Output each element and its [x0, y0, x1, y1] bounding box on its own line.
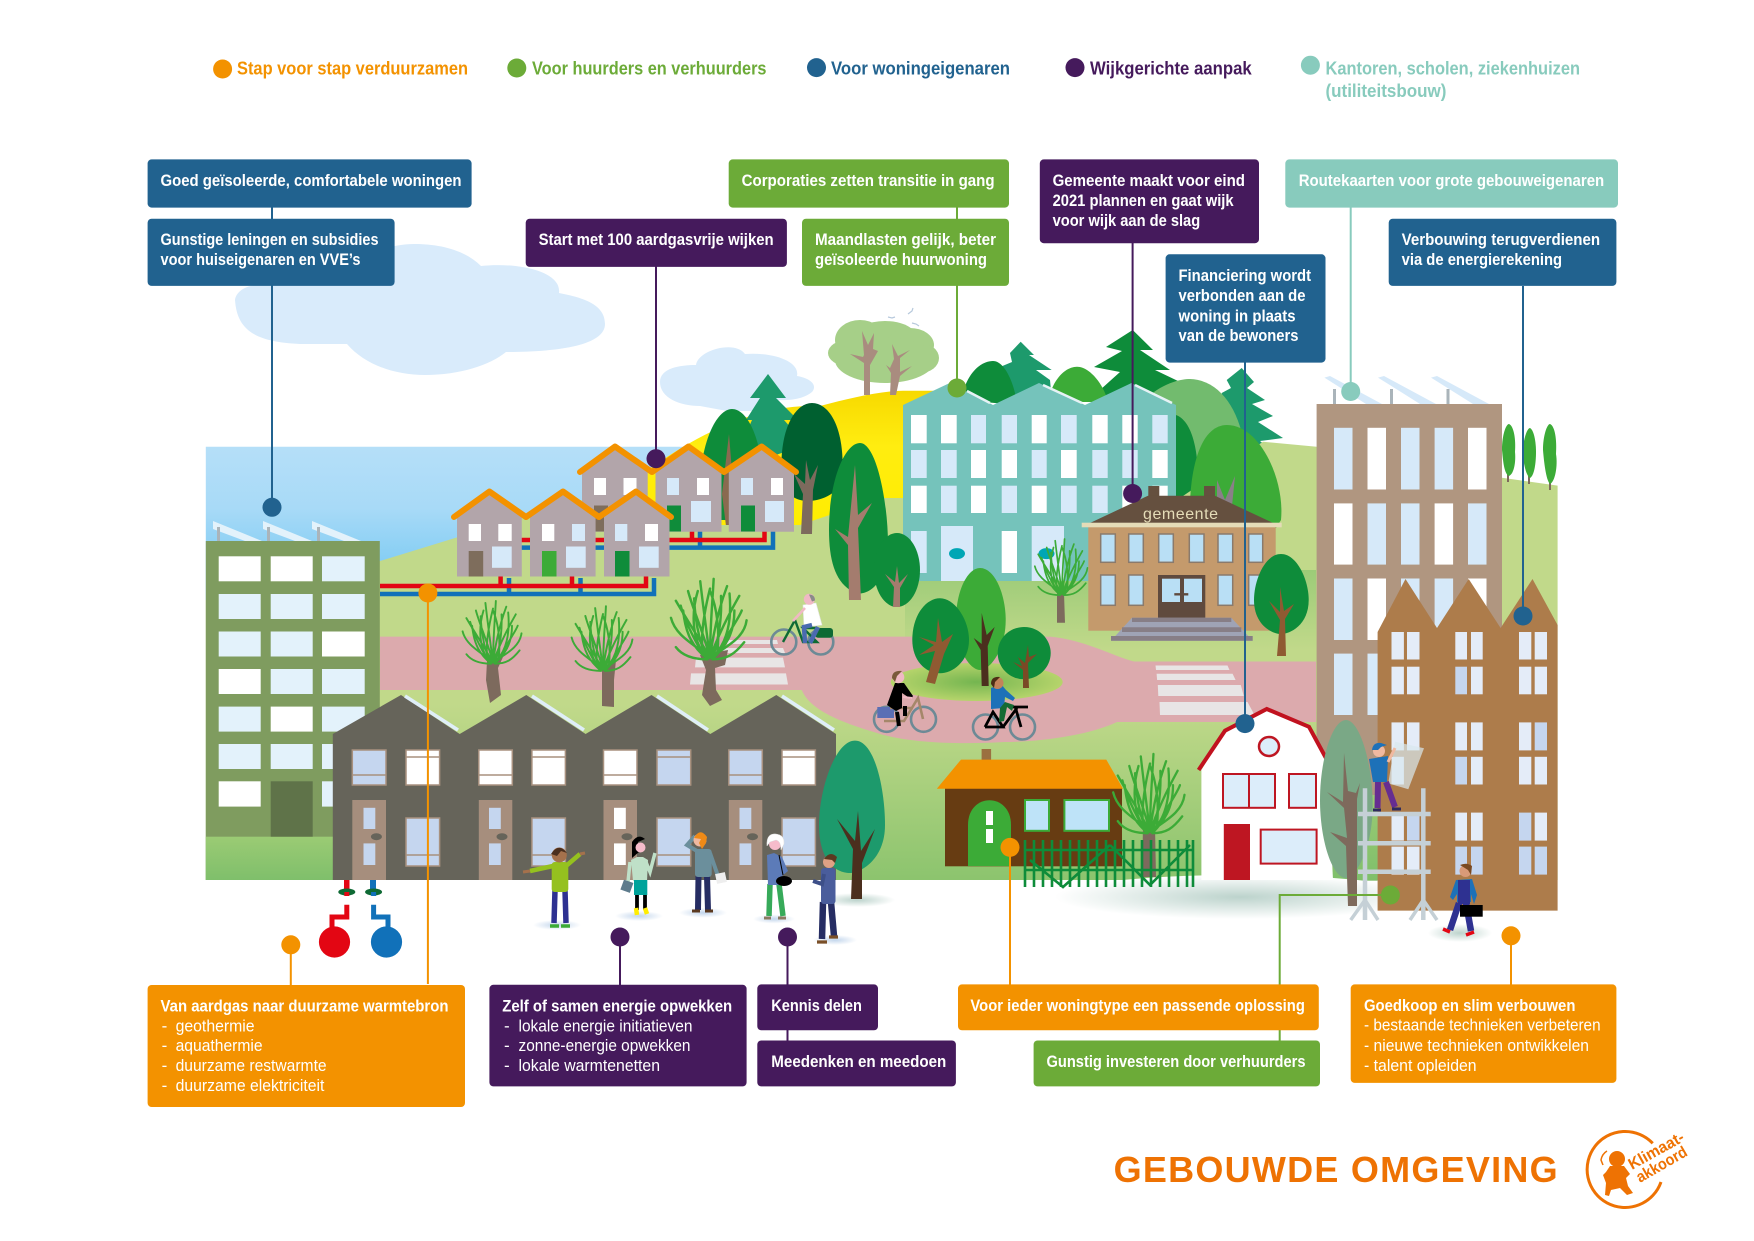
connector: verbouwing	[1514, 286, 1532, 626]
orange roof house	[937, 749, 1123, 866]
box: zelf of samen: zonne-energie opwekken	[518, 1036, 690, 1055]
box: goedkoop en slim: Goedkoop en slim verbouwen	[1364, 996, 1575, 1015]
poplars	[1502, 424, 1557, 490]
sea and sky	[206, 447, 730, 600]
connector: routekaarten	[1341, 207, 1360, 401]
grey-green tree	[1320, 720, 1373, 906]
box: gemeente plannen: 2021 plannen en gaat wijk	[1053, 191, 1234, 210]
box: zelf of samen: -	[504, 1036, 510, 1055]
box: kennis delen: Kennis delen	[771, 996, 862, 1015]
box: routekaarten	[1285, 159, 1618, 208]
box: financiering: van de bewoners	[1178, 326, 1298, 345]
road and island	[380, 637, 1316, 743]
round tree behind town hall	[1190, 425, 1281, 528]
box: van aardgas	[148, 985, 465, 1107]
crosswalk right	[1156, 666, 1254, 715]
connector: warmtenet	[418, 584, 437, 984]
box: meedenken: Meedenken en meedoen	[771, 1052, 946, 1071]
teal apartment building	[903, 383, 1176, 581]
legend item: woningeigenaren: Voor woningeigenaren	[831, 58, 1010, 78]
box: gemeente plannen: voor wijk aan de slag	[1053, 211, 1200, 230]
legend item: wijkgericht: Wijkgerichte aanpak	[1090, 58, 1253, 78]
box: van aardgas: duurzame elektriciteit	[176, 1076, 325, 1095]
tall office building	[1317, 376, 1502, 881]
legend	[213, 56, 1580, 101]
box: van aardgas: -	[162, 1076, 167, 1095]
box: goed geisoleerd	[148, 159, 472, 208]
legend item: stap voor stap: Stap voor stap verduurzamen	[237, 58, 468, 78]
connector: gemeente	[1123, 243, 1142, 503]
round trees behind the flats	[699, 330, 1245, 534]
box: goedkoop en slim: - nieuwe technieken ontwikkelen	[1364, 1036, 1589, 1055]
connector: wijken	[646, 266, 666, 468]
illustration: neighbourhood landscape	[206, 308, 1558, 958]
box: gemeente plannen: Gemeente maakt voor eind	[1053, 171, 1245, 190]
box: financiering: verbonden aan de	[1178, 286, 1306, 305]
box: routekaarten: Routekaarten voor grote gebouweigenaren	[1299, 171, 1604, 190]
fir trees	[730, 342, 1302, 490]
logo: Klimaatakkoord: akkoord	[1634, 1144, 1690, 1186]
teal tree in front	[819, 741, 895, 907]
box: goedkoop en slim: - talent opleiden	[1364, 1056, 1477, 1075]
box: van aardgas: -	[162, 1016, 167, 1035]
box: corporaties	[729, 159, 1009, 208]
connector: kennis delen	[778, 928, 797, 1041]
cyclist white shirt	[771, 594, 833, 654]
box: gemeente plannen	[1040, 159, 1259, 243]
box: van aardgas: -	[162, 1036, 167, 1055]
willow trees on road	[463, 539, 1088, 707]
gemeente town hall: gemeente	[1143, 506, 1218, 523]
box: goed geisoleerd: Goed geïsoleerde, comfortabele woningen	[160, 171, 462, 190]
birds	[888, 308, 919, 326]
box: van aardgas: Van aardgas naar duurzame warmtebron	[160, 996, 448, 1015]
logo: Klimaatakkoord	[1587, 1129, 1690, 1207]
box: verbouwing: Verbouwing terugverdienen	[1402, 230, 1600, 249]
lower windows	[406, 818, 815, 866]
legend item: utiliteitsbouw	[1301, 56, 1580, 101]
box: corporaties: Corporaties zetten transitie in gang	[742, 171, 995, 190]
back row houses with orange roofs	[580, 444, 796, 532]
box: financiering: woning in plaats	[1178, 306, 1296, 326]
white barn house with red roof	[1199, 709, 1333, 880]
crosswalk left	[690, 640, 788, 684]
island trees	[912, 568, 1051, 688]
willow and garden fence	[1025, 754, 1193, 887]
heating pipes	[380, 530, 773, 594]
box: financiering	[1166, 254, 1326, 363]
gemeente town hall	[1082, 486, 1282, 641]
title: GEBOUWDE OMGEVING	[1114, 1149, 1558, 1190]
connector: warmtebron	[281, 935, 300, 985]
small round tree	[874, 533, 920, 607]
logo: Klimaatakkoord: Klimaat-	[1626, 1129, 1687, 1173]
connector: energie opwekken	[610, 928, 630, 985]
connector: woningtype	[1000, 838, 1020, 985]
box: goedkoop en slim: - bestaande technieken verbeteren	[1364, 1016, 1601, 1035]
box: gunstig investeren: Gunstig investeren door verhuurders	[1046, 1052, 1306, 1071]
box: verbouwing: via de energierekening	[1402, 250, 1562, 269]
cyclist blue shirt	[973, 677, 1035, 740]
box: voor ieder woningtype	[958, 984, 1319, 1030]
yellow hill	[575, 391, 940, 530]
large cloud	[235, 244, 605, 375]
box: van aardgas: duurzame restwarmte	[176, 1056, 327, 1075]
box: maandlasten: geïsoleerde huurwoning	[815, 250, 987, 269]
brown canal houses	[1378, 579, 1558, 911]
town hall stairs	[1111, 618, 1253, 641]
box: start met 100 wijken: Start met 100 aardgasvrije wijken	[539, 230, 774, 249]
box: zelf of samen	[489, 985, 747, 1086]
box: zelf of samen: Zelf of samen energie opwekken	[502, 996, 732, 1015]
box: kennis delen	[757, 984, 878, 1030]
box: start met 100 wijken	[526, 219, 787, 267]
person: man with phone	[813, 854, 838, 942]
box: meedenken	[757, 1040, 956, 1086]
box: verbouwing	[1389, 219, 1616, 286]
box: van aardgas: -	[162, 1056, 167, 1075]
connector lines and dots	[262, 207, 1532, 1041]
scaffold with worker and glass pane	[1351, 742, 1437, 920]
box: goedkoop en slim	[1351, 984, 1616, 1083]
connector: financiering	[1236, 362, 1254, 733]
person: woman with skirt	[620, 837, 655, 915]
box: maandlasten	[802, 219, 1009, 286]
box: maandlasten: Maandlasten gelijk, beter	[815, 230, 996, 249]
box: financiering: Financiering wordt	[1178, 266, 1311, 285]
box: zelf of samen: -	[504, 1056, 510, 1075]
ground shadow	[1055, 875, 1425, 919]
box: gunstig investeren	[1034, 1040, 1320, 1086]
small cloud	[660, 347, 814, 411]
box: van aardgas: geothermie	[176, 1016, 255, 1035]
connector: verhuurders	[1280, 886, 1400, 1041]
ground shade behind town hall	[905, 570, 1316, 650]
person: older woman	[764, 834, 792, 918]
person: green shirt	[523, 848, 585, 926]
box: gunstige leningen: voor huiseigenaren en VVE’s	[160, 250, 360, 269]
upper windows	[352, 750, 815, 785]
legend item: utiliteitsbouw: (utiliteitsbouw)	[1326, 81, 1446, 101]
light tree on hill	[828, 320, 939, 395]
tree next to town hall	[1254, 554, 1309, 656]
doors	[352, 800, 762, 880]
person: man with orange hair	[687, 832, 727, 911]
terraced dark houses	[333, 695, 836, 880]
connector: isolatie	[262, 207, 282, 517]
front row houses with orange roofs	[454, 491, 671, 576]
legend item: huurders: Voor huurders en verhuurders	[532, 58, 766, 78]
people shadows	[533, 908, 857, 945]
green apartment block	[206, 521, 380, 880]
box: gunstige leningen: Gunstige leningen en subsidies	[160, 230, 378, 249]
tall tree	[829, 443, 888, 600]
walking worker with briefcase	[1428, 864, 1492, 942]
legend item: utiliteitsbouw: Kantoren, scholen, ziekenhuizen	[1326, 58, 1580, 78]
connector: slim verbouwen	[1502, 926, 1520, 985]
green ground	[206, 442, 1558, 880]
box: gunstige leningen	[148, 219, 395, 286]
loose heating pipes and tanks	[319, 880, 402, 958]
box: zelf of samen: lokale warmtenetten	[518, 1056, 660, 1075]
cyclist black shirt	[874, 671, 936, 732]
connector: corporaties	[948, 207, 966, 398]
dark tree	[781, 403, 843, 534]
box: van aardgas: aquathermie	[176, 1036, 263, 1055]
box: voor ieder woningtype: Voor ieder woningtype een passende oplossing	[970, 996, 1305, 1015]
box: zelf of samen: lokale energie initiatieven	[518, 1016, 692, 1035]
box: zelf of samen: -	[504, 1016, 510, 1035]
